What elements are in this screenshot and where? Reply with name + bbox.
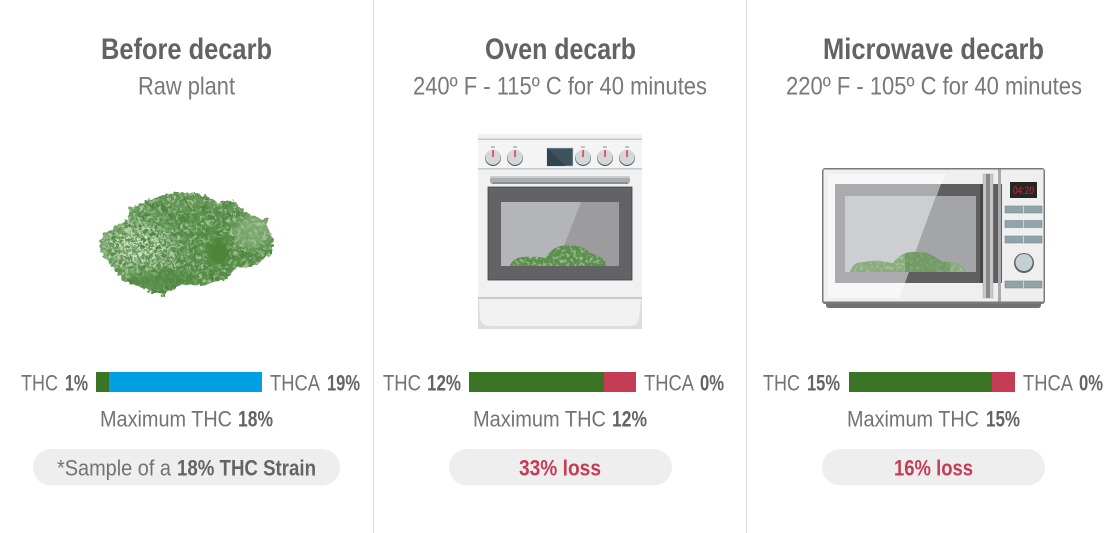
THC label: 1% [65,370,88,396]
panel: before decarb [21,33,360,486]
microwave knob [1014,253,1034,273]
divider: left [373,0,374,533]
maximum THC: Maximum THC [847,406,979,432]
callout: sample note: 18% THC Strain [177,456,316,480]
oven drawer [478,297,642,329]
THC label: THC [763,370,800,396]
callout: oven loss [449,449,672,486]
oven door [488,187,632,280]
oven knobs [485,146,635,166]
microwave window [835,184,1002,283]
THC label: THC [21,370,58,396]
THCA label: 0% [1079,370,1103,396]
THCA label: 0% [700,370,724,396]
subheading: raw plant: Raw plant [138,72,235,100]
callout: microwave loss [822,449,1045,486]
oven handle [490,176,630,184]
subheading: oven temperature: 240º F - 115º C for 40 minutes [413,72,707,100]
heading: microwave decarb: Microwave decarb [823,33,1044,66]
subheading: microwave temperature: 220º F - 105º C for 40 minutes [786,72,1082,100]
stacked bar [469,372,636,392]
THCA label: 19% [327,370,360,396]
THCA label [270,370,360,396]
maximum THC: Maximum THC [473,406,606,432]
stacked bar [96,372,262,392]
callout: oven loss: 33% loss [519,456,601,480]
microwave handle [980,174,993,298]
heading: before decarb: Before decarb [101,33,272,66]
microwave buttons [1005,206,1042,288]
panel: microwave decarb [763,33,1103,486]
callout: microwave loss: 16% loss [894,456,973,480]
THC label: THC [383,370,421,396]
callout: sample note [33,449,340,486]
THCA label: THCA [1023,370,1073,396]
divider: right [746,0,747,533]
THC label: 15% [807,370,840,396]
icon: microwave [822,168,1045,308]
microwave separator [998,170,1001,302]
maximum THC: 12% [612,406,647,432]
icon: oven [478,134,642,329]
callout: sample note: *Sample of a [57,456,172,480]
microwave display [1010,182,1037,198]
maximum THC: Maximum THC [100,406,232,432]
THC label: 12% [427,370,461,396]
oven display [547,148,573,166]
stacked bar [849,372,1015,392]
THC label [383,370,461,396]
maximum THC: 18% [238,406,273,432]
THC label [21,370,88,396]
maximum THC: 15% [986,406,1020,432]
microwave display: 04:20 [1013,185,1034,197]
THC label [763,370,840,396]
icon: raw cannabis bud [95,188,277,300]
heading: oven decarb: Oven decarb [485,33,636,66]
THCA label: THCA [644,370,694,396]
panel: oven decarb [383,33,724,486]
THCA label: THCA [270,370,320,396]
